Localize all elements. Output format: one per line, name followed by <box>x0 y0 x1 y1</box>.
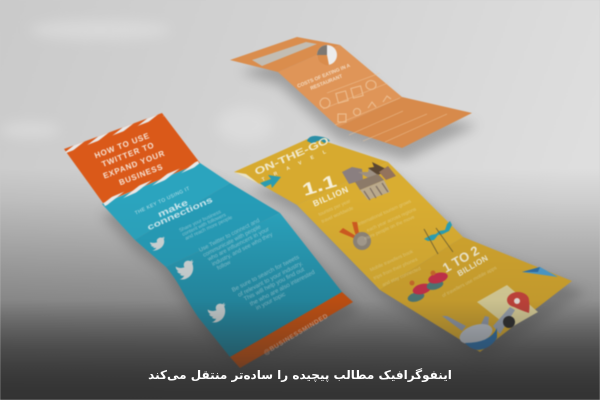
stat 1.1 billion: BILLION <box>311 184 350 209</box>
paragraphs: Mobile travellers book <box>369 249 415 273</box>
heading: COSTS OF EATING IN A <box>296 63 352 90</box>
body text: Share your business <box>178 209 223 234</box>
paragraphs: tourists per year <box>318 198 352 218</box>
white corner <box>234 172 262 185</box>
body text: who are influencers in your <box>206 227 271 263</box>
paragraphs: more people on the move <box>364 214 416 242</box>
cover title: TWITTER TO <box>100 140 156 169</box>
orange cover panel <box>64 113 200 203</box>
body text: content with followers <box>181 212 228 238</box>
paragraphs <box>318 198 498 299</box>
striped edge top <box>64 113 164 153</box>
striped band <box>102 161 200 206</box>
airplane <box>442 307 515 350</box>
medal icon <box>339 222 371 250</box>
paragraphs: travel worldwide <box>321 205 355 225</box>
blue badge <box>307 136 330 144</box>
stat 1 to 2 billion: BILLION <box>456 253 490 278</box>
pie chart <box>317 45 337 65</box>
section heading: make <box>156 198 190 220</box>
body text: This will help you find out <box>243 267 306 303</box>
yellow panels <box>234 137 572 352</box>
stat 1 to 2 billion: 1 TO 2 <box>440 243 482 275</box>
section heading <box>134 186 214 233</box>
section heading: THE KEY TO USING IT <box>134 186 191 217</box>
brochure: orange restaurant costs <box>230 37 472 148</box>
title: TRAVEL <box>261 145 336 183</box>
paragraphs: trips from their phones <box>373 256 419 282</box>
cover title <box>93 131 166 187</box>
cover title: HOW TO USE <box>93 131 151 160</box>
landmarks illustration <box>342 162 396 200</box>
body text <box>178 209 316 312</box>
body text: in your topic <box>255 292 287 312</box>
brochure: twitter <box>64 113 353 368</box>
map and location pin <box>477 285 538 328</box>
caption: اینفوگرافیک مطالب پیچیده را ساده‌تر منتقل می‌کند <box>148 368 452 382</box>
stat 1.1 billion <box>300 170 350 209</box>
body text: of relevant to your industry. <box>237 261 304 299</box>
orange panels <box>230 37 472 148</box>
brochure: yellow on-the-go travel <box>234 135 572 352</box>
twitter bird icons <box>149 236 231 324</box>
people icons <box>407 270 449 304</box>
paragraphs: International tourism grows <box>357 198 413 228</box>
body text: and reach more people <box>184 215 234 242</box>
paragraphs: and stay connected <box>381 266 422 288</box>
stat 1.1 billion: 1.1 <box>300 170 339 200</box>
body text: Use Twitter to connect and <box>198 218 261 254</box>
heading: RESTAURANT <box>310 74 343 92</box>
teal arrow <box>260 175 281 188</box>
blue panels <box>102 163 342 357</box>
footer handle: @BUSINESSMINDED <box>263 313 330 357</box>
body text: Be sure to search for tweets <box>231 255 300 294</box>
paragraphs: each year across regions <box>366 206 418 234</box>
paragraphs: of travellers use mobile apps <box>441 265 498 299</box>
body text: follow <box>216 259 233 272</box>
blue corner triangle <box>522 267 558 277</box>
title: ON-THE-GO <box>253 135 331 178</box>
icon rows <box>320 73 447 142</box>
body text: communicate with people <box>202 224 262 259</box>
body text: industry, and see who they <box>211 232 274 268</box>
cover title: EXPAND YOUR <box>102 149 166 181</box>
cover title: BUSINESS <box>118 162 164 187</box>
footer band <box>230 292 353 368</box>
paper texture blotches <box>0 20 273 143</box>
grey header band <box>252 42 317 66</box>
brochure shadows <box>102 55 585 372</box>
body text: the who are also interested <box>249 270 316 308</box>
teal sign <box>424 221 453 254</box>
section heading: connections <box>146 196 214 233</box>
